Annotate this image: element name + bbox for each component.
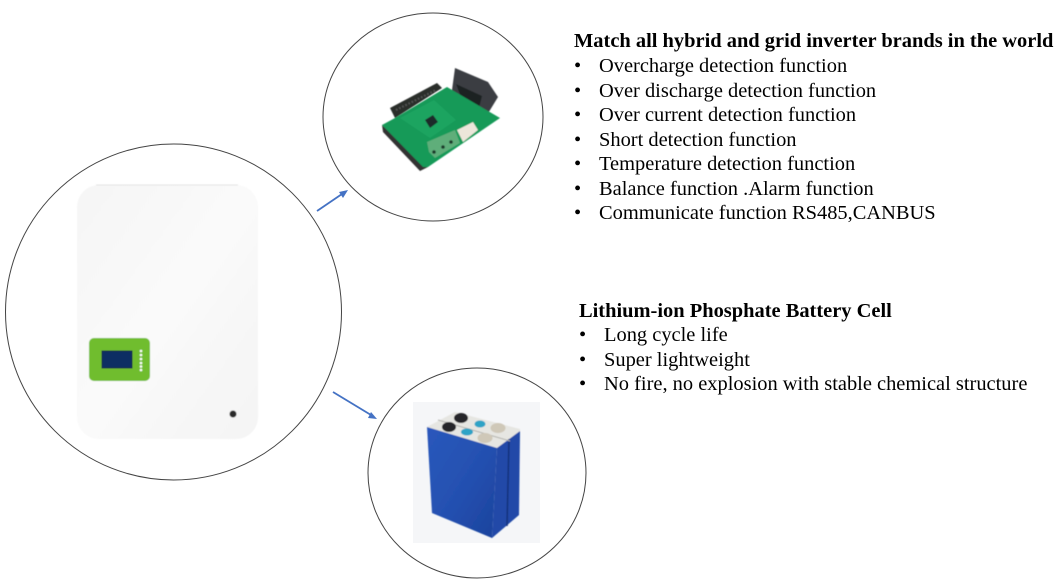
battery cell feature list: • <box>579 324 586 346</box>
BMS feature list: Short detection function <box>599 129 797 151</box>
arrow to BMS board <box>317 190 348 211</box>
large circle: battery product <box>6 144 342 480</box>
BMS feature list: Communicate function RS485,CANBUS <box>599 202 936 224</box>
BMS feature list: Temperature detection function <box>599 153 855 175</box>
BMS feature list: • <box>574 129 581 151</box>
green display panel <box>89 338 150 381</box>
BMS feature list: • <box>574 202 581 224</box>
BMS feature list: • <box>574 55 581 77</box>
battery cell photo <box>413 402 540 543</box>
battery wall unit <box>77 185 258 439</box>
battery cell feature list <box>579 324 1027 395</box>
heading: battery cell: Lithium-ion Phosphate Battery Cell <box>579 300 892 322</box>
BMS circuit board <box>382 68 500 171</box>
battery cell feature list: • <box>579 349 586 371</box>
power button <box>230 410 236 418</box>
battery cell feature list: • <box>579 373 586 395</box>
top circle: BMS board <box>323 13 543 221</box>
battery cell text block <box>579 300 1027 395</box>
BMS features text block <box>574 30 1054 224</box>
battery cell feature list: No fire, no explosion with stable chemical structure <box>604 373 1027 395</box>
BMS feature list: Balance function .Alarm function <box>599 178 874 200</box>
BMS feature list: • <box>574 153 581 175</box>
BMS feature list: Over current detection function <box>599 104 856 126</box>
battery cell feature list: Super lightweight <box>604 349 750 371</box>
BMS feature list: Over discharge detection function <box>599 80 876 102</box>
battery cell feature list: Long cycle life <box>604 324 728 346</box>
BMS feature list <box>574 55 936 224</box>
heading: inverter compatibility: Match all hybrid and grid inverter brands in the world <box>574 30 1054 52</box>
BMS feature list: • <box>574 104 581 126</box>
BMS feature list: • <box>574 80 581 102</box>
BMS feature list: Overcharge detection function <box>599 55 847 77</box>
bottom circle: battery cell <box>368 368 586 578</box>
arrow to battery cell <box>333 392 377 419</box>
BMS feature list: • <box>574 178 581 200</box>
